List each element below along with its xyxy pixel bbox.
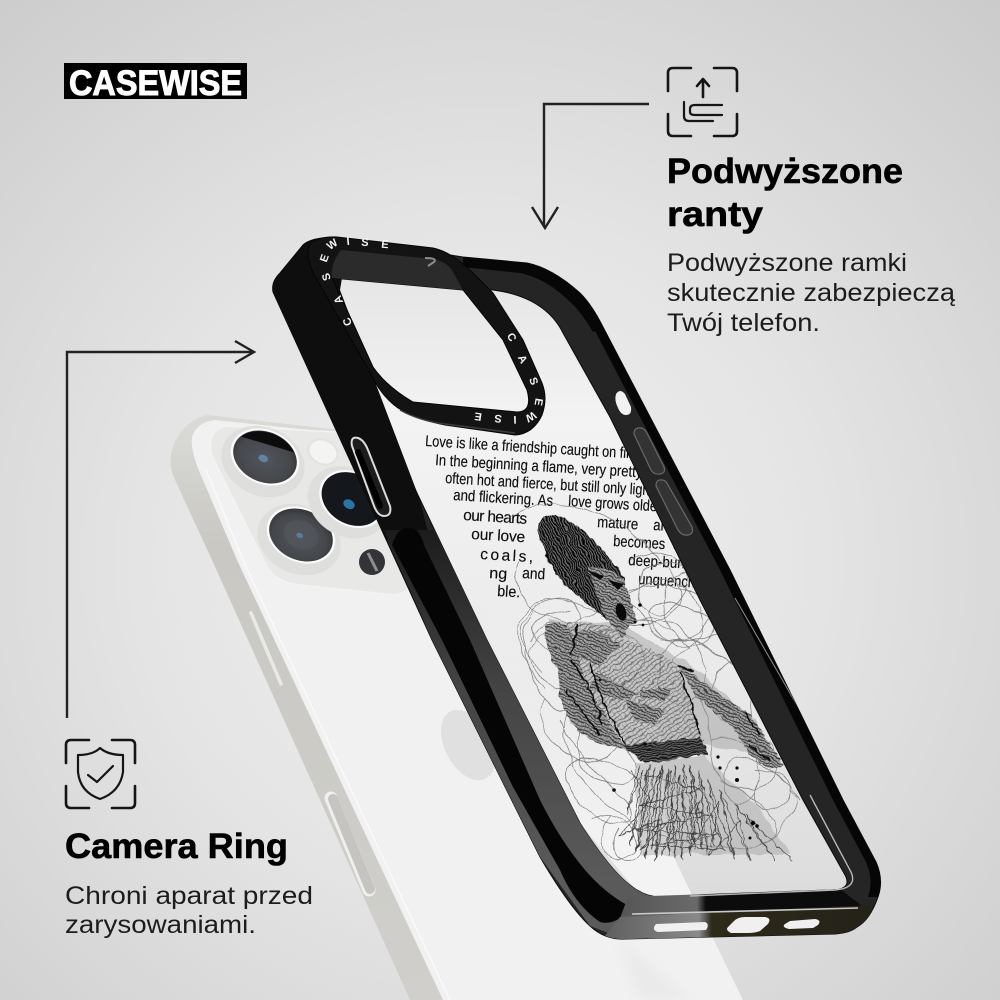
text: camera ring description: zarysowaniami. bbox=[65, 911, 256, 939]
ring engraved text: E bbox=[531, 397, 545, 406]
hair bbox=[537, 515, 632, 622]
left band upper bbox=[273, 240, 428, 540]
ring engraved text: S bbox=[494, 412, 502, 424]
face bbox=[588, 567, 636, 638]
right mute cutout bbox=[615, 391, 631, 415]
black core bbox=[392, 528, 629, 923]
ring engraved text: E bbox=[381, 239, 389, 251]
ring engraved text: C bbox=[504, 331, 518, 344]
camera lens bottom bbox=[246, 491, 352, 588]
ring engraved text bbox=[318, 236, 545, 425]
heading: Camera Ring: Camera Ring bbox=[65, 827, 288, 866]
printed poem: and bbox=[653, 517, 676, 535]
printed poem: Love is like a friendship caught on fire. bbox=[425, 433, 641, 463]
right outer black edge bbox=[593, 327, 881, 897]
text: raised edges description: Podwyższone ramki bbox=[667, 249, 907, 277]
ring wall highlight bbox=[425, 258, 435, 266]
left band lower gray bbox=[384, 530, 700, 939]
usb port bbox=[727, 917, 769, 933]
skirt strokes bbox=[620, 765, 792, 862]
ring band bbox=[308, 237, 545, 435]
right volume up button bbox=[634, 428, 664, 474]
ring engraved text: A bbox=[515, 353, 529, 366]
ring engraved text: S bbox=[320, 271, 334, 282]
printed poem: deep-burni bbox=[628, 552, 693, 573]
arrow: camera ring callout bbox=[67, 341, 254, 718]
ring engraved text: S bbox=[361, 237, 369, 249]
top outer dark edge bbox=[463, 257, 603, 332]
text: camera ring description bbox=[65, 882, 313, 939]
skirt under-tone bbox=[635, 755, 790, 855]
printed poem: In the beginning a flame, very pretty, bbox=[435, 452, 645, 481]
belt bbox=[621, 738, 709, 763]
clear case interior bbox=[320, 275, 847, 897]
edge highlight lines bbox=[206, 470, 450, 1000]
flash bbox=[304, 435, 342, 469]
scribble portrait bbox=[505, 505, 800, 862]
phone seen through case bbox=[487, 610, 692, 895]
bottom highlight bbox=[632, 908, 858, 914]
printed poem: unquencha bbox=[638, 571, 703, 592]
camera plateau bbox=[210, 426, 412, 595]
right arm bbox=[677, 663, 785, 770]
upper left sim tray pill bbox=[352, 438, 390, 516]
heading: Podwyższone ranty: Podwyższone bbox=[667, 152, 903, 191]
torso under-tone bbox=[548, 620, 775, 760]
mic port bbox=[784, 919, 819, 929]
phone back bbox=[192, 420, 743, 1000]
ring lower rim bbox=[400, 410, 515, 433]
ink dots bbox=[599, 603, 759, 840]
icon: shield bbox=[66, 740, 135, 808]
case bumper bbox=[255, 230, 881, 942]
left arm bbox=[545, 622, 625, 748]
printed poem: love grows older, bbox=[568, 493, 665, 516]
ring engraved text: C bbox=[341, 316, 355, 328]
bottom band bbox=[620, 889, 870, 918]
ring engraved text: I bbox=[346, 236, 350, 248]
bottom face bbox=[600, 905, 870, 942]
left arm outlines bbox=[566, 625, 625, 745]
text: raised edges description: Twój telefon. bbox=[667, 309, 820, 337]
printed poem: and flickering. As bbox=[453, 487, 554, 510]
logo: CASEWISE: CASEWISE bbox=[69, 64, 242, 103]
camera lens right bbox=[294, 452, 401, 553]
printed poem: our hearts bbox=[463, 507, 528, 528]
lidar bbox=[359, 549, 385, 575]
white phone bbox=[170, 413, 743, 1000]
icon: raised edges bbox=[668, 68, 737, 136]
interior rim highlight bbox=[690, 795, 853, 896]
chest shading bbox=[570, 630, 672, 725]
ring engraved text: S bbox=[526, 376, 540, 387]
ring engraved text: W bbox=[325, 237, 341, 253]
printed poem: becomes bbox=[613, 533, 666, 553]
printed poem: often hot and fierce, but still only light bbox=[445, 470, 654, 499]
arrow: top callout to raised edge bbox=[532, 104, 649, 228]
printed poem: c o a l s , bbox=[480, 546, 534, 566]
ring engraved text: A bbox=[332, 294, 346, 306]
bumper frame bbox=[273, 237, 881, 939]
speaker port bbox=[654, 922, 708, 932]
printed poem: ble. bbox=[497, 583, 521, 601]
ring engraved text: E bbox=[474, 410, 483, 422]
torso bbox=[560, 622, 704, 748]
ring engraved text: E bbox=[318, 253, 332, 264]
text: raised edges description: skutecznie zabezpieczą bbox=[667, 279, 955, 307]
printed poem: and bbox=[522, 565, 546, 583]
phone edge frame bbox=[170, 415, 743, 1000]
printed poem: mature bbox=[597, 514, 639, 533]
right edge light line bbox=[734, 598, 798, 708]
camera ring bbox=[308, 236, 545, 435]
right volume down button bbox=[656, 480, 692, 535]
soft reflection bbox=[620, 940, 690, 1000]
volume button bbox=[251, 613, 281, 684]
action button bbox=[331, 798, 370, 890]
right arm outlines bbox=[677, 665, 770, 760]
text: raised edges description bbox=[667, 249, 955, 337]
printed poem bbox=[425, 433, 703, 601]
face details bbox=[586, 570, 628, 622]
printed poem: as bbox=[673, 536, 688, 554]
camera lens top bbox=[210, 413, 316, 510]
ring engraved text: W bbox=[522, 408, 538, 424]
ring engraved text: I bbox=[513, 413, 517, 425]
ring inner wall bbox=[332, 250, 463, 290]
loose scribble lines bbox=[505, 505, 800, 861]
heading: Podwyższone ranty bbox=[667, 152, 903, 234]
printed poem: our love bbox=[471, 526, 526, 546]
heading: Podwyższone ranty: ranty bbox=[667, 195, 764, 234]
apple logo bbox=[430, 701, 506, 789]
printed poem: ng bbox=[489, 565, 508, 583]
text: camera ring description: Chroni aparat przed bbox=[65, 882, 313, 910]
